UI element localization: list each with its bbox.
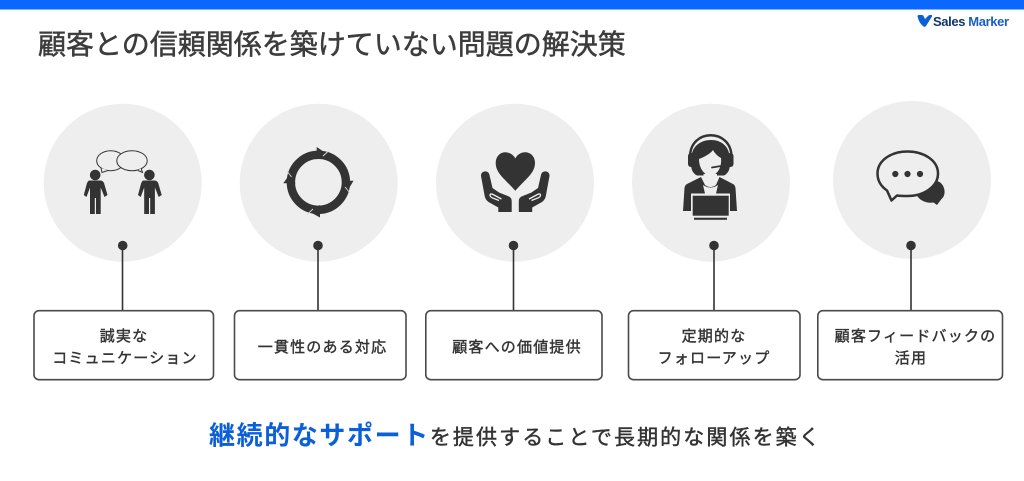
label box 1 [34,311,214,380]
label box 5: 顧客フィードバックの [835,328,996,345]
circle 4 [632,104,790,262]
icon: chat bubbles [878,152,945,205]
connector 2 [313,241,323,310]
label box 1: コミュニケーション [52,350,198,367]
column 3: providing value [426,104,602,380]
label box 3: 顧客への価値提供 [452,339,582,356]
icon: two people talking [84,151,162,214]
connector 1 [118,241,127,310]
label box 4: フォローアップ [658,350,770,367]
connector 5 [906,241,916,310]
connector 4 [709,241,719,310]
label box 4: 定期的な [682,328,746,345]
bottom message: 継続的なサポートを提供することで長期的な関係を築く [209,420,822,450]
column 2: consistent response [234,104,406,380]
circle 1 [44,104,202,262]
circle 5 [833,101,991,259]
connector 3 [509,241,518,310]
label box 2 [234,311,406,380]
logo: Sales Marker: Sales Marker [933,14,1009,29]
column 1: honest communication [34,104,214,380]
label box 2: 一貫性のある対応 [258,339,387,356]
circle 3 [436,104,594,262]
label box 4 [628,311,800,380]
column 4: regular follow-up [628,104,800,380]
label box 1: 誠実な [100,328,148,345]
top bar [0,0,1024,10]
title: 顧客との信頼関係を築けていない問題の解決策 [38,29,626,60]
circle 2 [240,104,398,262]
column 5: using customer feedback [818,101,1002,380]
icon: hands holding heart [481,152,550,212]
label box 5 [818,311,1002,380]
icon: cycle arrows [283,147,354,218]
icon: support agent with laptop [683,135,737,220]
label box 5: 活用 [895,350,927,367]
label box 3 [426,311,602,380]
